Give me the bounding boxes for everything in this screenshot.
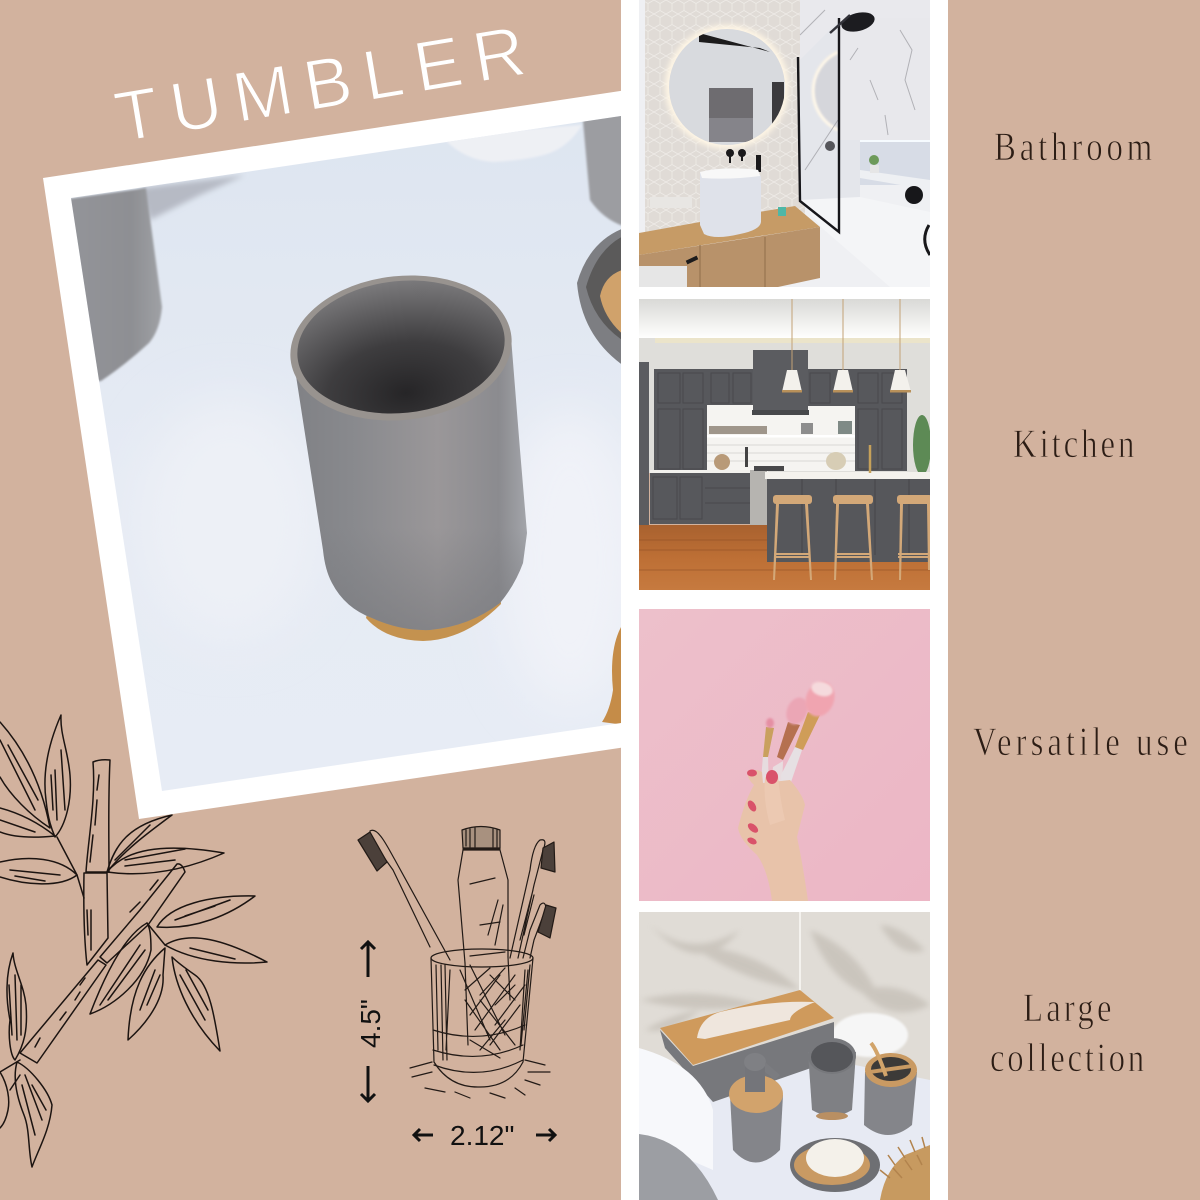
label: bathroom: Bathroom bbox=[994, 124, 1152, 169]
tumbler inside bbox=[297, 280, 505, 414]
blurred tumbler top left bbox=[71, 187, 163, 382]
tap set right bbox=[905, 186, 923, 204]
arrow down bbox=[361, 1066, 375, 1101]
cabinet bbox=[639, 227, 820, 287]
towel bbox=[639, 1134, 718, 1200]
glass cup bbox=[410, 949, 550, 1098]
tumbler rim bbox=[290, 276, 512, 420]
patterned wallpaper bbox=[639, 912, 930, 1102]
highlights on surface bbox=[215, 432, 617, 674]
photo backdrop bbox=[60, 100, 630, 800]
dimension: height 4.5 inches bbox=[355, 942, 386, 1101]
upper cabinets bbox=[654, 369, 907, 471]
dimension: width 2.12 inches bbox=[414, 1120, 555, 1151]
mirror glow bbox=[665, 25, 789, 149]
pink backdrop bbox=[639, 609, 930, 901]
plant bbox=[869, 155, 879, 165]
toothpaste tube bbox=[458, 826, 508, 963]
height label: 4.5" bbox=[355, 999, 386, 1048]
faucets bbox=[726, 149, 761, 172]
hairbrush bbox=[880, 1145, 930, 1200]
hood bbox=[753, 350, 808, 410]
hand and arm bbox=[738, 770, 808, 901]
label: versatile use: Versatile use bbox=[973, 719, 1188, 764]
shelf and utensils bbox=[707, 435, 855, 438]
soap dish bbox=[790, 1138, 880, 1192]
small brush bbox=[760, 718, 774, 795]
base cabinets bbox=[650, 473, 750, 524]
bowl with bamboo insert at right bbox=[577, 229, 621, 364]
white cloth at top bbox=[445, 125, 582, 162]
left tall column bbox=[639, 362, 649, 527]
wood counter bbox=[639, 206, 820, 255]
label: kitchen: Kitchen bbox=[1013, 421, 1134, 466]
left toothbrush bbox=[358, 830, 450, 960]
stools bbox=[773, 495, 932, 580]
middle brush bbox=[770, 694, 812, 800]
title: TUMBLER bbox=[109, 12, 531, 158]
white counter bbox=[639, 1060, 930, 1200]
photo: makeup brushes in hand bbox=[639, 609, 930, 901]
sink left bbox=[639, 1048, 713, 1170]
backsplash bbox=[707, 405, 855, 471]
label: large collection: collection bbox=[990, 1035, 1144, 1080]
tumbler body bbox=[292, 337, 527, 630]
main photo: grey tumbler on white surface bbox=[60, 100, 640, 800]
glass panel area bbox=[800, 140, 860, 200]
round mirror bbox=[669, 29, 785, 145]
floor bbox=[639, 525, 930, 590]
label: large collection: Large bbox=[1023, 985, 1112, 1030]
thumb bbox=[765, 773, 785, 825]
hex tile wall bbox=[645, 0, 805, 232]
arrow up bbox=[361, 942, 375, 977]
soap dispenser bbox=[729, 1053, 783, 1162]
tumbler bamboo base bbox=[366, 602, 501, 641]
wall switch bbox=[650, 197, 692, 208]
white vertical strips bbox=[621, 0, 948, 1200]
diffuser bbox=[778, 207, 786, 216]
large brush bbox=[781, 677, 840, 795]
shower head bbox=[841, 12, 875, 32]
shower glass black frame bbox=[798, 18, 839, 232]
marble wall bbox=[800, 0, 805, 60]
faucet bbox=[869, 445, 871, 473]
shower knob bbox=[825, 141, 835, 151]
blurred tumbler top right bbox=[582, 116, 621, 226]
second mirror bbox=[815, 54, 838, 128]
white sponge bbox=[832, 1013, 908, 1057]
subway tiles bbox=[707, 445, 855, 461]
toothbrush holder bbox=[864, 1043, 917, 1135]
oven bbox=[750, 470, 767, 528]
bamboo tray at bottom right bbox=[602, 627, 621, 724]
illustration: bamboo branch bbox=[0, 715, 267, 1167]
towel and bar bbox=[639, 266, 687, 287]
island bbox=[767, 478, 930, 562]
nails bbox=[746, 770, 778, 846]
photo: bath accessory collection bbox=[639, 912, 930, 1200]
tilted white photo frame bbox=[43, 88, 640, 819]
wall bbox=[639, 338, 930, 473]
arrow right bbox=[536, 1129, 555, 1141]
ceiling bbox=[639, 299, 930, 339]
illustration: toothbrushes and tube in cup bbox=[358, 826, 556, 1098]
photo: bathroom bbox=[639, 0, 930, 287]
shadow beside left tumbler bbox=[140, 175, 245, 220]
plant bbox=[913, 415, 931, 475]
width label: 2.12" bbox=[450, 1120, 514, 1151]
cabinet door lines bbox=[658, 373, 902, 469]
bathtub bbox=[801, 197, 860, 232]
tissue box bbox=[660, 990, 834, 1102]
arrow left bbox=[414, 1129, 433, 1141]
label: large collection bbox=[990, 985, 1144, 1080]
niche with shelf bbox=[860, 140, 930, 185]
side labels bbox=[973, 124, 1188, 1080]
white basin bbox=[700, 168, 761, 237]
photo: kitchen bbox=[639, 299, 932, 590]
body lower shading bbox=[328, 560, 524, 630]
tumbler bbox=[808, 1038, 856, 1120]
marble veins bbox=[800, 10, 915, 170]
pendant lamps bbox=[782, 299, 911, 392]
white backdrop bbox=[639, 0, 930, 287]
right toothbrushes bbox=[510, 840, 556, 958]
